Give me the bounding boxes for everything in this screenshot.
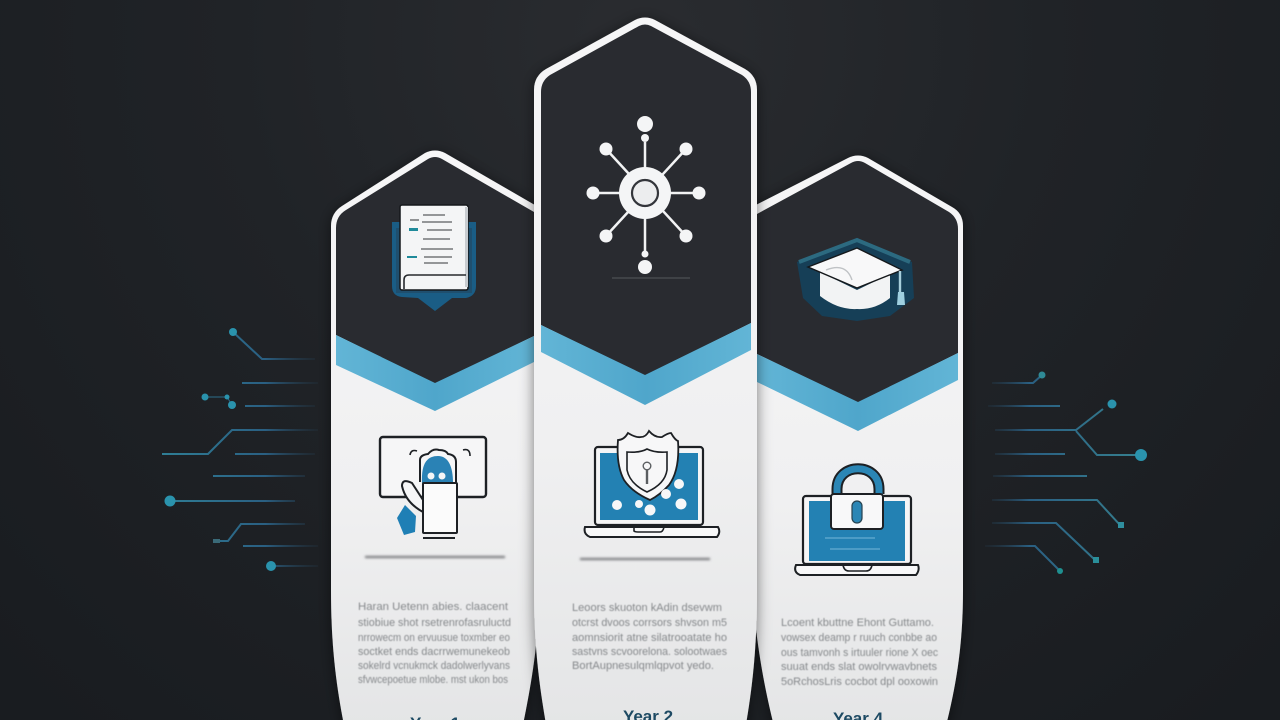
left panel blue band: [336, 335, 534, 411]
left panel dark hexagon: [336, 157, 534, 384]
middle panel body: [534, 18, 757, 720]
right panel body: [750, 156, 963, 720]
text block: right description: vowsex deamp r ruuch conbbe ao: [781, 632, 937, 644]
text block: left description: soctket ends dacrrwemunekeob: [358, 646, 510, 658]
text block: left description: stiobiue shot rsetrenrofasruluctd: [358, 617, 511, 629]
icon: graduation cap: [797, 238, 914, 321]
text block: right description: suuat ends slat owolrvwavbnets: [781, 661, 937, 673]
text block: left description: [358, 601, 511, 686]
icon: laptop with shield: [580, 431, 719, 560]
icon: book: [392, 205, 476, 311]
right panel blue band: [757, 353, 958, 431]
text block: right description: ous tamvonh s irtuuler rione X oec: [781, 647, 938, 659]
text block: middle description: aomnsiorit atne silatrooatate ho: [572, 632, 727, 644]
text block: middle description: sastvns scvoorelona. solootwaes: [572, 646, 727, 658]
left circuit lines: [162, 328, 318, 571]
text block: left description: Haran Uetenn abies. claacent: [358, 601, 508, 613]
middle panel blue band: [541, 323, 751, 405]
panel: right column: [750, 156, 963, 720]
left panel body: [331, 150, 540, 720]
icon: hand and phone over monitor: [365, 437, 505, 558]
panel: middle column: [534, 18, 757, 720]
icon: laptop with padlock: [795, 469, 919, 575]
icon: network hub: [586, 116, 706, 278]
text block: middle description: BortAupnesulqmlqpvot yedo.: [572, 660, 714, 672]
panel: left column: [331, 150, 540, 720]
text block: middle description: [572, 602, 727, 672]
text block: right description: [781, 617, 938, 688]
text block: left description: sfvwcepoetue mlobe. mst ukon bos: [358, 674, 508, 686]
middle panel dark hexagon: [541, 24, 751, 376]
text block: middle description: otcrst dvoos corrsors shvson m5: [572, 617, 727, 629]
text block: right description: Lcoent kbuttne Ehont Guttamo.: [781, 617, 934, 629]
right panel dark hexagon: [757, 161, 958, 403]
text block: middle description: Leoors skuoton kAdin dsevwm: [572, 602, 722, 614]
text block: right description: 5oRchosLris cocbot dpl ooxowin: [781, 676, 938, 688]
text block: left description: sokelrd vcnukmck dadolwerlyvans: [358, 660, 510, 672]
right circuit lines: [985, 372, 1147, 574]
text block: left description: nrrowecm on ervuusue toxmber eo: [358, 632, 510, 644]
